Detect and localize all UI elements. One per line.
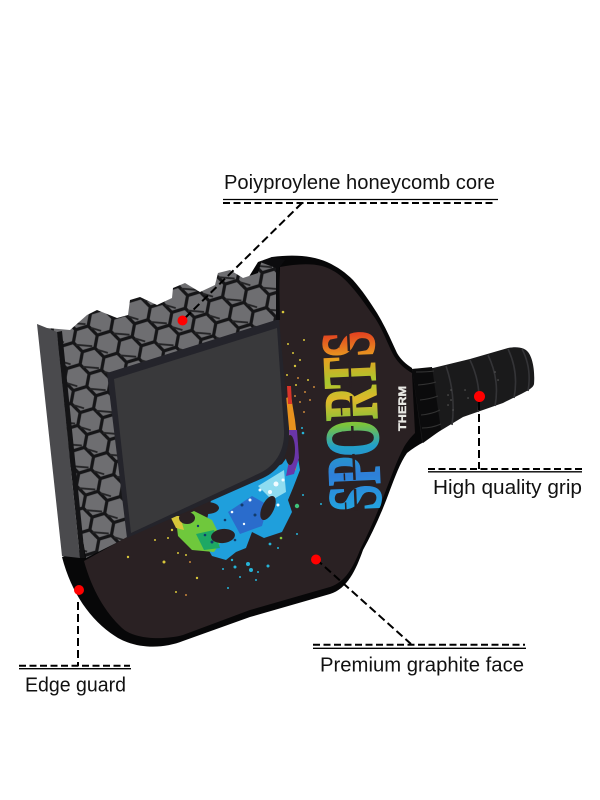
callout: grip	[428, 391, 582, 499]
label: edge guard: Edge guard	[25, 675, 126, 697]
honeycomb core	[47, 260, 279, 558]
SPORTS lettering	[306, 329, 398, 513]
label: grip: High quality grip	[433, 477, 582, 499]
label: graphite face: Premium graphite face	[320, 654, 524, 676]
callout: edge guard	[19, 585, 131, 697]
SPORTS lettering: SPORTS	[306, 329, 398, 513]
callout: graphite face	[311, 554, 526, 676]
handle with grip tape	[412, 347, 534, 443]
THERM logo: THERM	[397, 386, 409, 431]
paddle	[37, 256, 534, 647]
left edge strip	[37, 324, 85, 558]
infographic: paddle anatomy	[19, 174, 582, 696]
edge guard rim	[62, 256, 424, 647]
black top band	[260, 257, 285, 320]
graphite face	[84, 264, 415, 638]
paint splash	[127, 311, 322, 596]
label: honeycomb core: Poiyproylene honeycomb core	[224, 172, 495, 194]
foam slab	[107, 319, 289, 538]
callout: honeycomb core	[178, 172, 498, 326]
